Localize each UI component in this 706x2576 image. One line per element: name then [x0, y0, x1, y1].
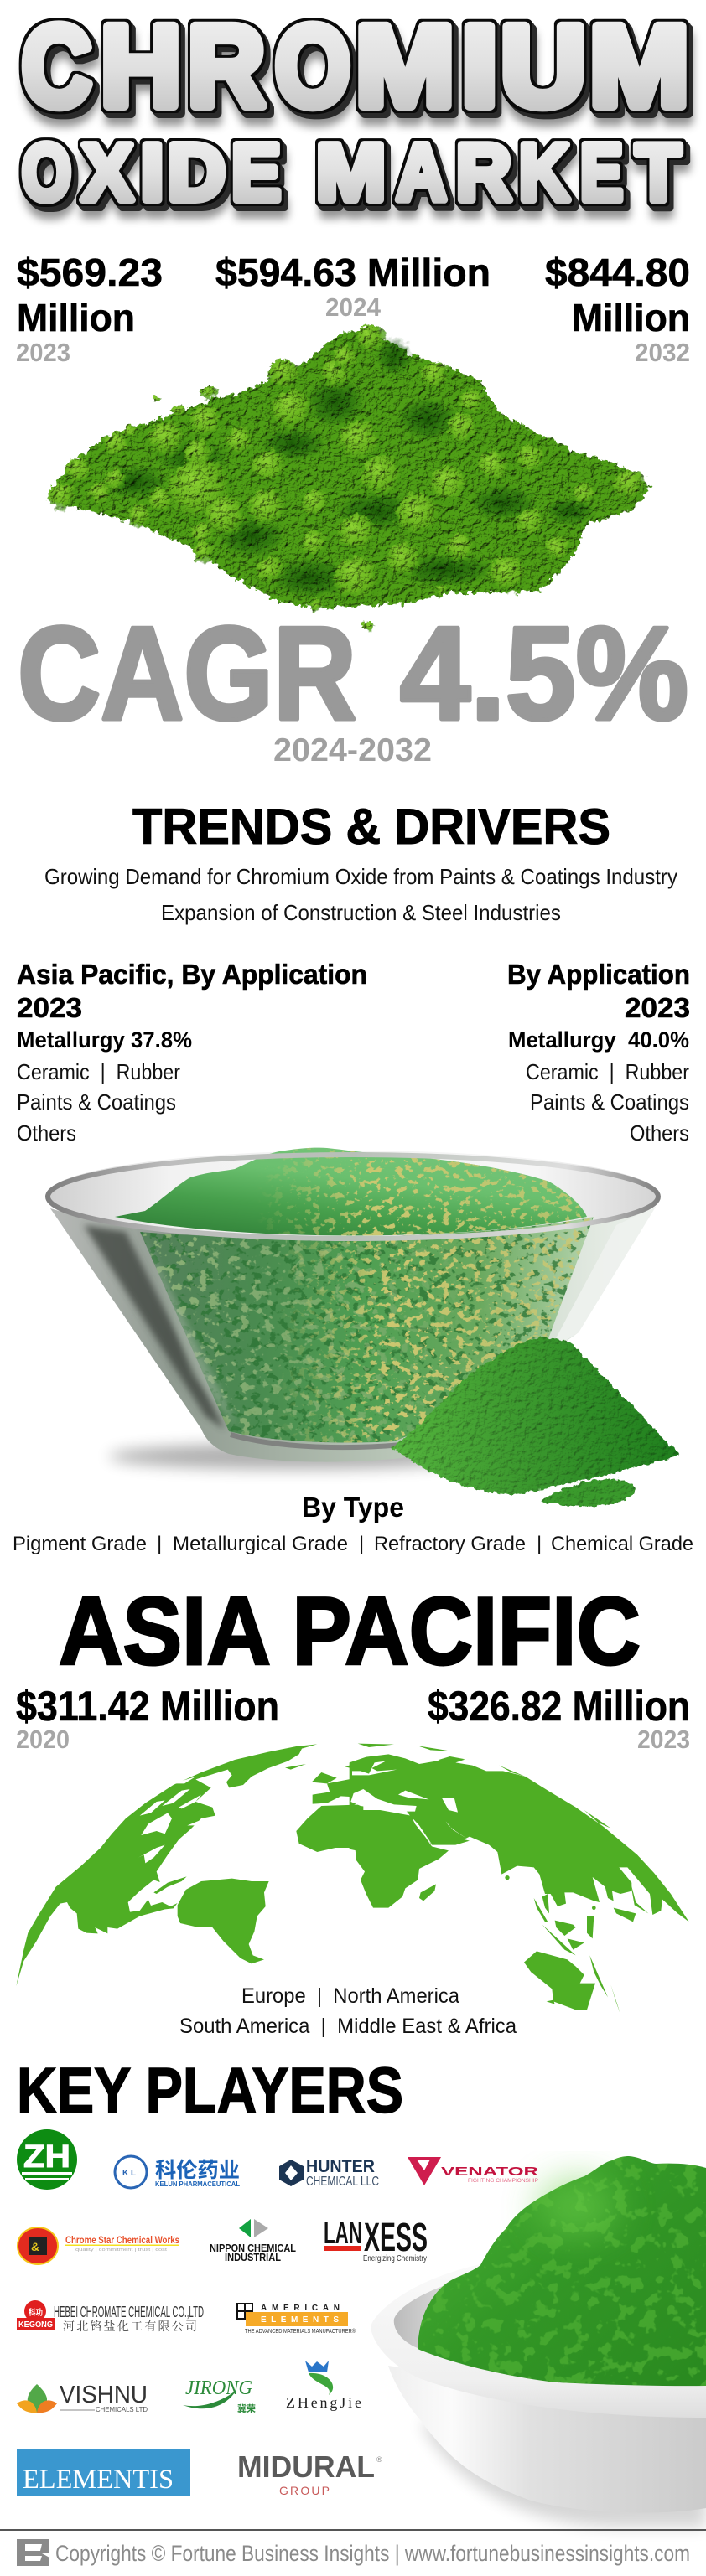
text: other regions: South America | Middle East & Africa — [179, 2015, 517, 2038]
panel: Asia Pacific by application: Metallurgy 37.8% — [17, 1027, 192, 1053]
logo: Hebei Chromate Chemical — [17, 2300, 204, 2335]
footer rule — [0, 2529, 706, 2531]
map: Americas, western Europe and West Africa — [16, 1744, 363, 1986]
title line: OXIDE MARKET: O — [22, 127, 71, 218]
logo: Midural Group — [237, 2449, 382, 2497]
logo: Lanxess: Energizing Chemistry — [363, 2254, 427, 2263]
logo: Venator: VENATOR — [441, 2165, 538, 2179]
logo: Hebei Chromate Chemical: KEGONG — [18, 2320, 53, 2330]
title line: CHROMIUM: C — [22, 3, 91, 131]
map: curved green world map — [16, 1744, 689, 2014]
title line: OXIDE MARKET: X — [82, 127, 132, 218]
logo: Vishnu Chemicals: CHEMICALS LTD — [96, 2406, 148, 2413]
logo: Hebei Chromate Chemical: 河北铬盐化工有限公司 — [63, 2318, 197, 2335]
title line: CHROMIUM: M — [589, 3, 689, 131]
image: green chromium oxide powder pile — [49, 324, 651, 633]
stat: Asia Pacific 2020 — [16, 1683, 279, 1754]
logo: ZH — [17, 2129, 77, 2190]
text: type categories: Pigment Grade — [13, 1533, 147, 1555]
stat: Asia Pacific 2020: $311.42 Million — [16, 1683, 279, 1730]
logo: ZhengJie — [286, 2361, 361, 2411]
stat: 2024 market value — [215, 251, 491, 322]
logo: Kelun Pharmaceutical — [115, 2156, 240, 2188]
text: other regions: Europe | North America — [241, 1984, 459, 2008]
logo: Midural Group: GROUP — [279, 2484, 330, 2497]
image: glass bowl of green powder — [48, 1148, 658, 1469]
logo: JiRong: 冀荣 — [237, 2403, 256, 2414]
title line: CHROMIUM: I — [461, 3, 498, 131]
title line: CHROMIUM: R — [188, 3, 265, 131]
panel: global by application: 2023 — [625, 992, 690, 1023]
title line: OXIDE MARKET: I — [141, 127, 164, 218]
logo: ZH: ZH — [23, 2139, 70, 2175]
heading: Asia Pacific: ASIA PACIFIC — [59, 1578, 641, 1685]
title line: OXIDE MARKET: M — [316, 127, 386, 218]
title line: OXIDE MARKET: K — [519, 127, 569, 218]
CAGR headline: 4.5% — [400, 600, 688, 747]
logo: Lanxess — [324, 2216, 428, 2263]
logo: Venator — [408, 2157, 538, 2185]
stat: Asia Pacific 2020: 2020 — [16, 1725, 70, 1754]
logo: Vishnu Chemicals: VISHNU — [60, 2382, 148, 2408]
logo: Hebei Chromate Chemical: HEBEI CHROMATE CHEMICAL CO.,LTD — [54, 2304, 204, 2320]
logo: Kelun Pharmaceutical: KELUN PHARMACEUTICAL — [155, 2180, 240, 2188]
logo: JiRong: JIRONG — [185, 2377, 252, 2399]
logo: Chrome Star Chemical Works: quality | commitment | trust | cost — [75, 2248, 168, 2253]
logo: Midural Group: ® — [376, 2455, 382, 2464]
title line: OXIDE MARKET: A — [396, 127, 446, 218]
logo: Chrome Star Chemical Works: Chrome Star Chemical Works — [65, 2236, 179, 2246]
stat: 2023 market value: Million — [17, 296, 135, 339]
stat: 2032 market value: Million — [572, 296, 690, 339]
logo: Midural Group: MIDURAL — [237, 2449, 375, 2484]
title line: CHROMIUM: H — [101, 3, 181, 131]
logo: ZhengJie: ZHengJie — [286, 2394, 361, 2411]
logo: Hebei Chromate Chemical: 科功 — [29, 2307, 43, 2318]
text: type categories: Metallurgical Grade — [173, 1533, 348, 1555]
panel: global by application: Metallurgy 40.0% — [508, 1027, 689, 1053]
title line: CHROMIUM: U — [501, 3, 586, 131]
text: type categories: | — [359, 1533, 364, 1555]
text: other regions — [179, 1984, 517, 2038]
icon: Fortune Business Insights logo — [17, 2539, 49, 2566]
CAGR headline: CAGR — [18, 600, 356, 747]
logo: Hunter Chemical: HUNTER — [306, 2157, 375, 2176]
logo: Kelun Pharmaceutical: 科伦药业 — [155, 2159, 240, 2182]
logo: Chrome Star Chemical Works: & — [31, 2240, 39, 2253]
panel: global by application: Ceramic | Rubber — [526, 1059, 689, 1084]
text: driver two: Expansion of Construction & Steel Industries — [161, 900, 561, 925]
logo: Elementis — [17, 2449, 190, 2496]
CAGR headline — [18, 600, 688, 747]
text: type categories: Refractory Grade — [374, 1533, 526, 1555]
stat: 2023 market value — [16, 251, 163, 367]
stat: 2024 market value: $594.63 Million — [215, 251, 491, 294]
logo: Nippon Chemical Industrial: NIPPON CHEMICAL — [210, 2242, 296, 2254]
map: Eurasia, Africa and Oceania — [350, 1744, 689, 2014]
stat: 2023 market value: 2023 — [16, 338, 70, 367]
logo: Kelun Pharmaceutical: K L — [122, 2169, 136, 2178]
logo: American Elements: ELEMENTS — [261, 2315, 339, 2325]
title — [22, 3, 689, 218]
panel: global by application: Paints & Coatings — [530, 1089, 689, 1115]
stat: 2032 market value: 2032 — [635, 338, 690, 367]
title line: CHROMIUM: M — [356, 3, 454, 131]
stat: Asia Pacific 2023 — [428, 1683, 690, 1754]
panel: Asia Pacific by application: 2023 — [17, 992, 82, 1023]
heading: key players: KEY PLAYERS — [17, 2055, 403, 2127]
text: type categories: | — [537, 1533, 542, 1555]
stat: Asia Pacific 2023: 2023 — [637, 1725, 690, 1754]
CAGR period: 2024-2032 — [273, 732, 432, 768]
title line: OXIDE MARKET: T — [636, 127, 681, 218]
text: type categories — [13, 1533, 693, 1555]
panel: global by application: Others — [630, 1120, 689, 1146]
logo: American Elements: AMERICAN — [261, 2304, 340, 2313]
stat: 2032 market value — [545, 251, 690, 367]
title line: OXIDE MARKET: E — [231, 127, 281, 218]
stat: 2023 market value: $569.23 — [17, 251, 163, 294]
text: type categories: Chemical Grade — [551, 1533, 693, 1555]
logo: Lanxess: XESS — [364, 2216, 428, 2260]
logo: Elementis: ELEMENTIS — [23, 2465, 174, 2495]
title line: OXIDE MARKET: D — [168, 127, 226, 218]
panel: Asia Pacific by application: Ceramic | Rubber — [17, 1059, 180, 1084]
image: loose green powder mound — [392, 1337, 679, 1506]
panel: Asia Pacific by application: Asia Pacific, By Application — [17, 959, 367, 990]
heading: by type: By Type — [302, 1492, 404, 1523]
panel: Asia Pacific by application: Others — [17, 1120, 76, 1146]
logo: Lanxess: LAN — [324, 2216, 362, 2250]
logo: American Elements: THE ADVANCED MATERIALS MANUFACTURER® — [245, 2328, 356, 2335]
heading: trends and drivers: TRENDS & DRIVERS — [132, 799, 610, 855]
title line: OXIDE MARKET: R — [456, 127, 511, 218]
logo: Hunter Chemical — [279, 2157, 379, 2189]
title line: OXIDE MARKET: E — [580, 127, 623, 218]
text: type categories: | — [157, 1533, 162, 1555]
image: white bowl with green powder — [371, 2156, 706, 2527]
logo: Venator: FIGHTING CHAMPIONSHIP — [468, 2179, 538, 2184]
stat: 2032 market value: $844.80 — [545, 251, 690, 294]
panel: Asia Pacific by application — [17, 959, 367, 1146]
logo: Nippon Chemical Industrial — [210, 2219, 296, 2263]
title line: CHROMIUM: O — [275, 3, 350, 131]
logo: Nippon Chemical Industrial: INDUSTRIAL — [225, 2251, 281, 2263]
logo: JiRong — [183, 2377, 256, 2414]
logo: Hunter Chemical: CHEMICAL LLC — [306, 2175, 379, 2189]
logo: Chrome Star Chemical Works — [18, 2227, 179, 2264]
panel: global by application: By Application — [507, 959, 690, 990]
panel: global by application — [507, 959, 690, 1146]
stat: 2024 market value: 2024 — [325, 292, 382, 322]
logo: American Elements — [237, 2304, 356, 2335]
panel: Asia Pacific by application: Paints & Coatings — [17, 1089, 176, 1115]
logo: Vishnu Chemicals — [17, 2382, 148, 2413]
